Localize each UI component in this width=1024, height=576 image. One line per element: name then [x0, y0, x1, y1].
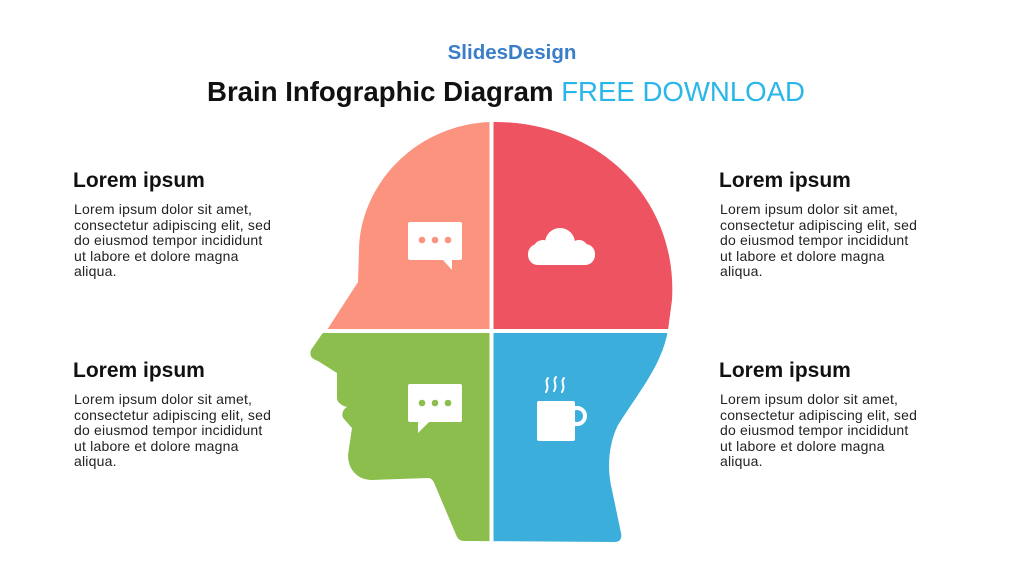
head diagram: [310, 122, 672, 542]
text block: bottom right: [719, 359, 917, 469]
text block: bottom right: Lorem ipsum dolor sit amet,: [720, 391, 898, 407]
text block: top left: ut labore et dolore magna: [74, 248, 239, 264]
text block: top left: aliqua.: [74, 263, 117, 279]
text block: top right: Lorem ipsum dolor sit amet,: [720, 201, 898, 217]
text block: top right: consectetur adipiscing elit, sed: [720, 217, 917, 233]
icon: cloud: [528, 228, 595, 265]
icon: speech bubble green: [408, 384, 462, 433]
text block: top left: [73, 169, 271, 279]
text block: top right: [719, 169, 917, 279]
brand: SlidesDesign: [448, 41, 576, 64]
text block: bottom right: Lorem ipsum: [719, 359, 851, 382]
text block: bottom right: aliqua.: [720, 453, 763, 469]
text block: top left: Lorem ipsum dolor sit amet,: [74, 201, 252, 217]
text block: top left: consectetur adipiscing elit, sed: [74, 217, 271, 233]
title: Brain Infographic Diagram FREE DOWNLOAD: [207, 76, 805, 107]
text block: top right: Lorem ipsum: [719, 169, 851, 192]
text block: top right: ut labore et dolore magna: [720, 248, 885, 264]
text block: top right: aliqua.: [720, 263, 763, 279]
text block: top left: do eiusmod tempor incididunt: [74, 232, 262, 248]
icon: speech bubble salmon: [408, 222, 462, 270]
text block: bottom left: ut labore et dolore magna: [74, 438, 239, 454]
text block: bottom right: consectetur adipiscing elit, sed: [720, 407, 917, 423]
text block: bottom right: ut labore et dolore magna: [720, 438, 885, 454]
quadrant: salmon: [326, 122, 490, 331]
text block: bottom left: consectetur adipiscing elit, sed: [74, 407, 271, 423]
quadrant: red: [494, 122, 672, 331]
quadrant: green: [300, 331, 491, 551]
text block: bottom left: aliqua.: [74, 453, 117, 469]
icon: coffee mug: [537, 377, 585, 441]
quadrant: blue: [491, 331, 668, 542]
text block: bottom left: Lorem ipsum: [73, 359, 205, 382]
text block: bottom left: do eiusmod tempor incididunt: [74, 422, 262, 438]
text block: bottom left: Lorem ipsum dolor sit amet,: [74, 391, 252, 407]
text block: top right: do eiusmod tempor incididunt: [720, 232, 908, 248]
text block: bottom right: do eiusmod tempor incididunt: [720, 422, 908, 438]
text block: top left: Lorem ipsum: [73, 169, 205, 192]
text block: bottom left: [73, 359, 271, 469]
